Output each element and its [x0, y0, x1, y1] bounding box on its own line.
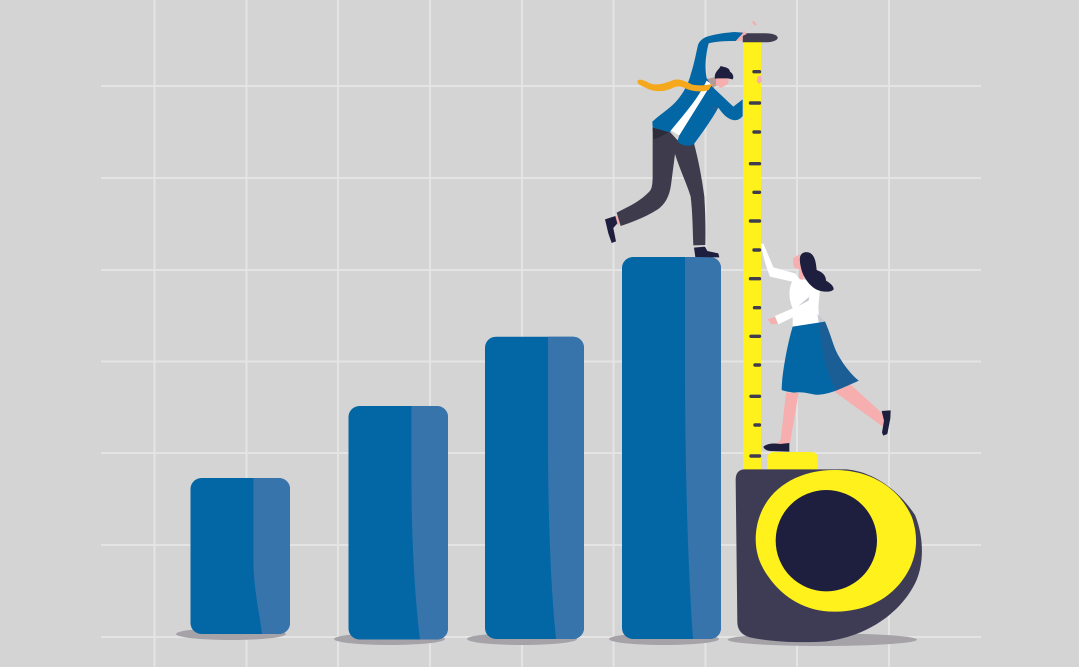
bar 1: [176, 478, 290, 640]
tape measure case: [728, 452, 922, 646]
bar 4: [609, 257, 721, 645]
yellow measuring tape blade: [743, 33, 778, 472]
woman reaching up the tape: [761, 243, 891, 452]
bar 3: [467, 337, 584, 645]
man measuring at the top of the tape: [605, 21, 762, 257]
bar 2: [334, 406, 448, 645]
